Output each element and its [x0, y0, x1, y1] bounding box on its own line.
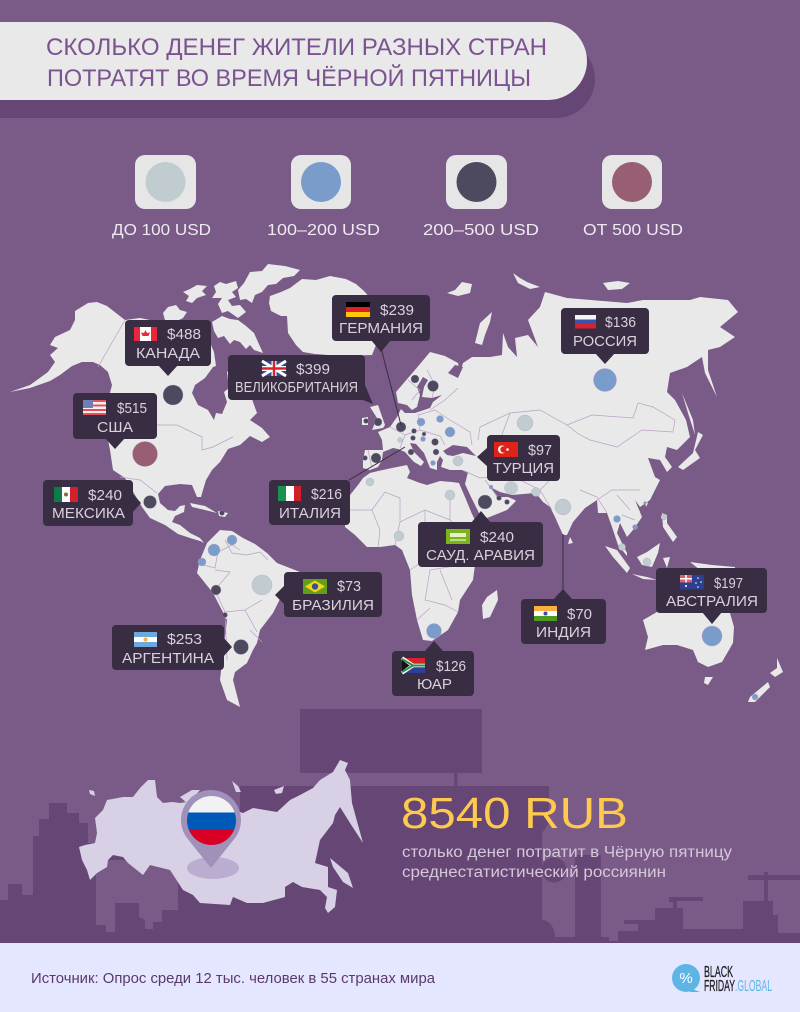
- callout: United Kingdom: $399: [296, 361, 330, 378]
- callout: USA: [73, 393, 157, 449]
- location pin with Russian flag: [181, 790, 241, 879]
- header banner: [0, 22, 595, 118]
- callout: South Africa: ЮАР: [417, 676, 452, 693]
- callout: Mexico: МЕКСИКА: [52, 505, 125, 522]
- legend: [112, 155, 683, 239]
- callout: India: $70: [567, 606, 592, 623]
- callout: Canada: КАНАДА: [136, 345, 200, 362]
- legend: 100–200 USD: [267, 222, 380, 239]
- callout: United Kingdom: [228, 355, 373, 404]
- callout: Australia: АВСТРАЛИЯ: [666, 593, 758, 610]
- leader lines: [349, 348, 563, 592]
- Africa: [345, 465, 500, 641]
- callout: South Africa: [392, 641, 474, 696]
- callout: Russia: $136: [605, 314, 636, 331]
- map of Russia: [79, 760, 363, 913]
- callout: India: [521, 589, 606, 644]
- callout: Germany: $239: [380, 302, 414, 319]
- footer bar: [0, 943, 800, 1012]
- skyline background: [0, 709, 800, 943]
- callout: Germany: ГЕРМАНИЯ: [339, 320, 423, 337]
- callout: USA: $515: [117, 400, 147, 417]
- logo: BLACK: [704, 964, 733, 981]
- callout: Italy: $216: [311, 486, 342, 503]
- description: среднестатистический россиянин: [402, 864, 666, 881]
- callout: Mexico: $240: [88, 487, 122, 504]
- callout: Russia: [561, 308, 649, 364]
- callout: Saudi Arabia: САУД. АРАВИЯ: [426, 547, 535, 564]
- callout: Mexico: [43, 480, 141, 526]
- South America: [197, 530, 300, 707]
- callout: Brazil: [275, 572, 382, 617]
- callout: Saudi Arabia: $240: [480, 529, 514, 546]
- callout: Turkey: $97: [528, 442, 552, 459]
- description: [402, 844, 732, 881]
- callout: Italy: ИТАЛИЯ: [279, 505, 341, 522]
- callout: Argentina: $253: [167, 631, 202, 648]
- source: Источник: Опрос среди 12 тыс. человек в 55 странах мира: [31, 970, 436, 987]
- logo: [672, 964, 772, 995]
- legend: ДО 100 USD: [112, 222, 211, 239]
- logo: FRIDAY: [704, 978, 735, 995]
- islands: [362, 273, 783, 702]
- header banner: ПОТРАТЯТ ВО ВРЕМЯ ЧЁРНОЙ ПЯТНИЦЫ: [47, 64, 531, 92]
- legend: 200–500 USD: [423, 222, 539, 239]
- callout: Canada: $488: [167, 326, 201, 343]
- country borders: [98, 320, 675, 660]
- callout: Turkey: [477, 435, 560, 481]
- callout: Canada: [125, 320, 211, 376]
- callout: South Africa: $126: [436, 658, 466, 675]
- header banner: СКОЛЬКО ДЕНЕГ ЖИТЕЛИ РАЗНЫХ СТРАН: [46, 34, 547, 61]
- callout: Saudi Arabia: [418, 511, 543, 567]
- description: столько денег потратит в Чёрную пятницу: [402, 844, 732, 861]
- big number: 8540 RUB: [401, 789, 628, 838]
- spending dots: [132, 368, 758, 700]
- callout: Italy: [269, 480, 350, 525]
- callout: Australia: $197: [714, 575, 743, 592]
- logo: %: [679, 970, 693, 987]
- callout: Brazil: БРАЗИЛИЯ: [292, 597, 374, 614]
- Greenland: [269, 276, 376, 356]
- callout: Russia: РОССИЯ: [573, 333, 637, 350]
- callout: Turkey: ТУРЦИЯ: [493, 460, 554, 477]
- world map: [10, 264, 783, 707]
- callout: United Kingdom: ВЕЛИКОБРИТАНИЯ: [235, 379, 358, 396]
- callout: India: ИНДИЯ: [536, 624, 591, 641]
- callout: Argentina: АРГЕНТИНА: [122, 650, 214, 667]
- Eurasia: [363, 292, 738, 556]
- inland seas: [398, 365, 543, 506]
- callout: Brazil: $73: [337, 578, 361, 595]
- North America: [10, 264, 300, 543]
- callout: Germany: [332, 295, 430, 352]
- callout: Australia: [656, 568, 767, 624]
- callout: USA: США: [97, 419, 133, 436]
- legend: ОТ 500 USD: [583, 222, 683, 239]
- callout: Argentina: [112, 625, 232, 670]
